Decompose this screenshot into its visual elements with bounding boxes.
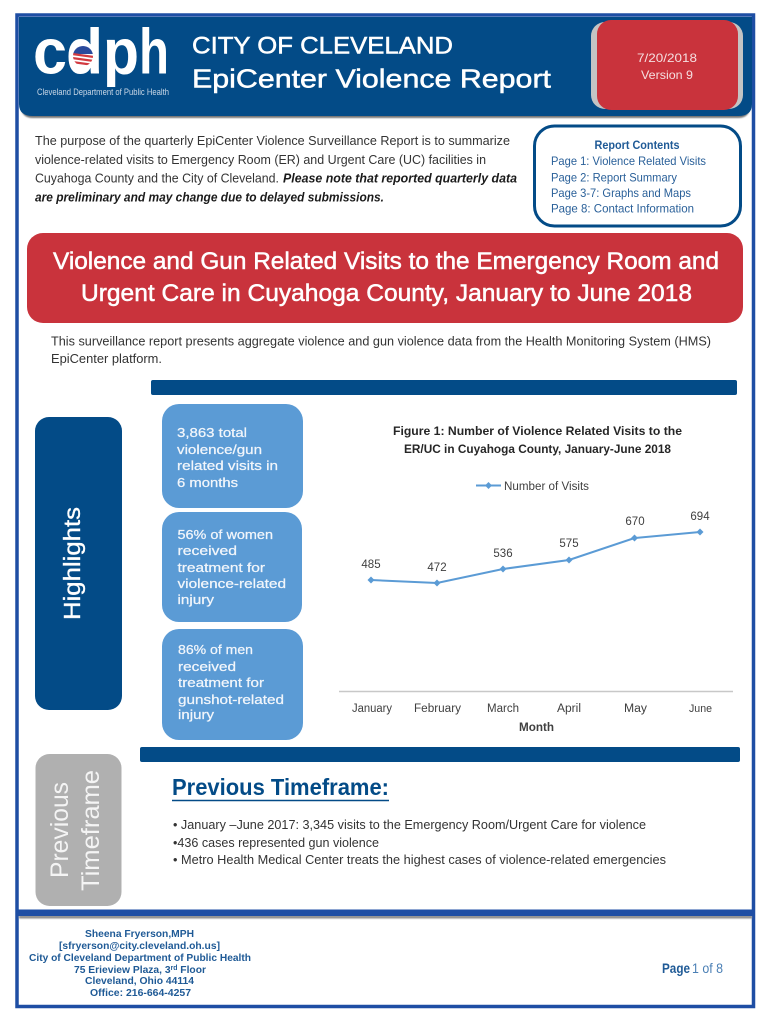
highlight card: women: violence-related — [178, 576, 286, 591]
date and version badge: 7/20/2018 — [637, 51, 697, 65]
highlight card: men: injury — [178, 707, 215, 722]
axis title: Month — [519, 722, 554, 734]
section bar: previous timeframe — [140, 747, 740, 762]
chart title — [393, 424, 682, 456]
previous timeframe bullets: • Metro Health Medical Center treats the highest cases of violence-related emergencies — [173, 853, 666, 867]
panel: previous timeframe label: Previous — [46, 782, 74, 878]
panel: highlights label: Highlights — [59, 507, 85, 620]
header title: EpiCenter Violence Report — [192, 64, 552, 94]
footer contact block — [29, 928, 251, 999]
highlight card: men: 86% of men — [178, 642, 253, 657]
highlight card: women: treatment for — [178, 560, 266, 575]
surveillance intro text: This surveillance report presents aggregate violence and gun violence data from the Health Monitoring System (HMS) — [51, 334, 711, 348]
month labels — [352, 703, 712, 715]
purpose paragraph — [35, 134, 517, 204]
purpose paragraph: are preliminary and may change due to delayed submissions. — [35, 190, 384, 204]
previous timeframe bullets: •436 cases represented gun violence — [173, 836, 379, 850]
red title banner — [27, 233, 743, 323]
highlight card: total visits: 6 months — [177, 475, 239, 490]
highlight card: total visits: violence/gun — [177, 442, 262, 457]
surveillance intro text — [51, 334, 711, 366]
logo: cdph: c — [33, 16, 67, 88]
highlight card: men: gunshot-related — [178, 692, 284, 707]
highlight card: men: treatment for — [178, 675, 265, 690]
highlight card: women: received — [178, 543, 237, 558]
header title: CITY OF CLEVELAND — [192, 32, 453, 60]
red title banner: Urgent Care in Cuyahoga County, January to June 2018 — [81, 280, 692, 307]
highlight card: total visits: related visits in — [177, 458, 278, 473]
footer contact block: Office: 216-664-4257 — [90, 987, 191, 999]
red title banner: Violence and Gun Related Visits to the Emergency Room and — [53, 248, 719, 275]
footer contact block: rd — [171, 965, 177, 972]
purpose paragraph: Please note that reported quarterly data — [283, 172, 517, 186]
previous timeframe heading: Previous Timeframe: — [172, 774, 389, 800]
date and version badge: Version 9 — [641, 68, 693, 82]
panel: previous timeframe label — [36, 754, 122, 906]
report contents box — [534, 126, 740, 226]
report contents box: Page 8: Contact Information — [551, 202, 694, 216]
chart title: Figure 1: Number of Violence Related Visits to the — [393, 424, 682, 438]
header title — [192, 32, 552, 94]
highlight card: total visits — [162, 404, 303, 508]
data labels: 694 — [690, 511, 710, 523]
report contents box: Page 3-7: Graphs and Maps — [551, 186, 691, 200]
month labels: June — [689, 703, 712, 715]
month labels: May — [624, 703, 647, 715]
previous timeframe bullets — [173, 818, 666, 867]
footer contact block: Floor — [177, 964, 206, 976]
highlight card: women: injury — [178, 592, 215, 607]
month labels: April — [557, 703, 581, 715]
chart axis — [339, 690, 733, 692]
logo: cdph: Cleveland Department of Public Health — [37, 87, 169, 98]
footer contact block: City of Cleveland Department of Public Health — [29, 952, 251, 964]
chart legend: Number of Visits — [504, 481, 589, 493]
logo: cdph — [35, 27, 168, 97]
page number: 1 of 8 — [692, 960, 723, 976]
line chart: figure 1 — [339, 424, 733, 734]
report contents box: Report Contents — [594, 140, 680, 152]
data labels: 670 — [625, 516, 645, 528]
highlight card: men: received — [178, 659, 236, 674]
footer contact block: 75 Erieview Plaza, 3 — [74, 964, 173, 976]
data labels: 472 — [427, 562, 447, 574]
header banner — [19, 16, 752, 118]
month labels: February — [414, 703, 461, 715]
previous timeframe bullets: • January –June 2017: 3,345 visits to the Emergency Room/Urgent Care for violence — [173, 818, 646, 832]
page number — [662, 960, 723, 976]
report contents box: Page 2: Report Summary — [551, 170, 677, 184]
logo: cdph: h — [139, 16, 169, 88]
data labels: 485 — [361, 559, 381, 571]
data line — [368, 528, 704, 586]
page number: Page — [662, 960, 690, 976]
logo: cdph: p — [103, 16, 139, 88]
surveillance intro text: EpiCenter platform. — [51, 352, 162, 366]
purpose paragraph: The purpose of the quarterly EpiCenter Violence Surveillance Report is to summarize — [35, 134, 510, 148]
panel: previous timeframe label: Timeframe — [77, 770, 105, 891]
highlight card: women: 56% of women — [178, 527, 273, 542]
purpose paragraph: violence-related visits to Emergency Room (ER) and Urgent Care (UC) facilities in — [35, 153, 486, 167]
date and version badge — [591, 20, 743, 110]
month labels: January — [352, 703, 392, 715]
month labels: March — [487, 703, 519, 715]
footer contact block: Sheena Fryerson,MPH — [85, 928, 194, 940]
logo: cdph: d — [66, 16, 103, 88]
data labels: 575 — [559, 538, 579, 550]
highlight card: women — [162, 512, 302, 622]
data labels: 536 — [493, 548, 513, 560]
panel: highlights label — [35, 417, 122, 710]
purpose paragraph: Cuyahoga County and the City of Cleveland. — [35, 172, 279, 186]
footer contact block: [sfryerson@city.cleveland.oh.us] — [59, 940, 220, 952]
chart title: ER/UC in Cuyahoga County, January-June 2018 — [404, 442, 671, 456]
footer contact block: Cleveland, Ohio 44114 — [85, 975, 194, 987]
highlight card: men — [162, 629, 303, 740]
section bar: highlights — [151, 380, 737, 395]
highlight card: total visits: 3,863 total — [177, 425, 247, 440]
report contents box: Page 1: Violence Related Visits — [551, 154, 706, 168]
data labels — [361, 511, 710, 574]
